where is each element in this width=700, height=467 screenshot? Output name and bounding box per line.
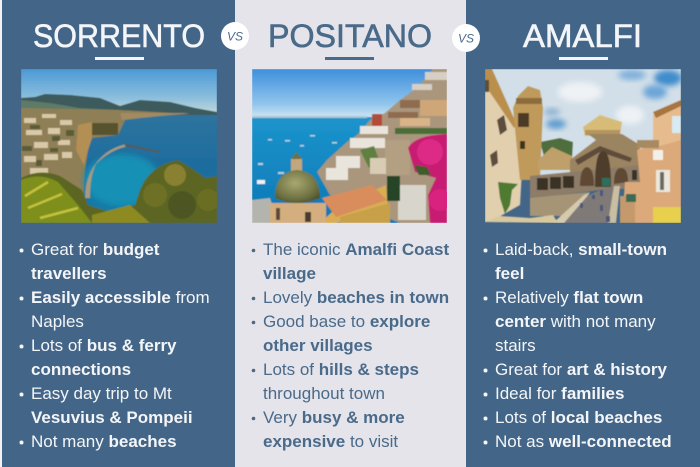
title: Sorrento: SORRENTO [33, 18, 205, 54]
badge: vs Positano/Amalfi: VS [458, 32, 474, 46]
panel: Sorrento [2, 0, 235, 467]
list: Sorrento points: Vesuvius & Pompeii [31, 408, 193, 427]
list: Sorrento points: Not many beaches [31, 432, 177, 451]
list: Positano points: expensive to visit [263, 432, 398, 451]
list: Amalfi points: stairs [495, 336, 536, 355]
badge: vs Positano/Amalfi [452, 24, 480, 52]
list: Positano points: Good base to explore [263, 312, 430, 331]
list: Sorrento points: Easy day trip to Mt [31, 384, 172, 403]
list: Positano points [252, 240, 449, 451]
list: Sorrento points: Lots of bus & ferry [31, 336, 177, 355]
panel: Amalfi [466, 0, 700, 467]
title: Amalfi: AMALFI [523, 18, 642, 54]
list: Positano points: Lots of hills & steps [263, 360, 419, 379]
badge: vs Sorrento/Positano [221, 22, 249, 50]
list: Positano points: Lovely beaches in town [263, 288, 449, 307]
list: Sorrento points: Easily accessible from [31, 288, 210, 307]
list: Positano points: The iconic Amalfi Coast [263, 240, 449, 259]
list: Amalfi points: Laid-back, small-town [495, 240, 667, 259]
list: Sorrento points [20, 240, 210, 451]
list: Positano points: village [263, 264, 316, 283]
badge: vs Sorrento/Positano: VS [227, 30, 243, 44]
photo: Amalfi cathedral [485, 69, 682, 223]
list: Amalfi points: feel [495, 264, 524, 283]
list: Amalfi points: center with not many [495, 312, 656, 331]
list: Sorrento points: connections [31, 360, 131, 379]
list: Sorrento points: Great for budget [31, 240, 160, 259]
list: Positano points: Very busy & more [263, 408, 405, 427]
list: Amalfi points: Lots of local beaches [495, 408, 662, 427]
list: Amalfi points: Not as well-connected [495, 432, 672, 451]
photo: Sorrento coastline [21, 69, 219, 223]
panel: Positano [235, 0, 466, 467]
photo: Positano village [252, 69, 451, 223]
list: Sorrento points: Naples [31, 312, 84, 331]
list: Amalfi points: Great for art & history [495, 360, 667, 379]
list: Amalfi points: Relatively flat town [495, 288, 643, 307]
list: Amalfi points: Ideal for families [495, 384, 624, 403]
list: Amalfi points [484, 240, 672, 451]
title: Positano: POSITANO [268, 18, 432, 54]
list: Positano points: throughout town [263, 384, 385, 403]
list: Sorrento points: travellers [31, 264, 107, 283]
list: Positano points: other villages [263, 336, 373, 355]
